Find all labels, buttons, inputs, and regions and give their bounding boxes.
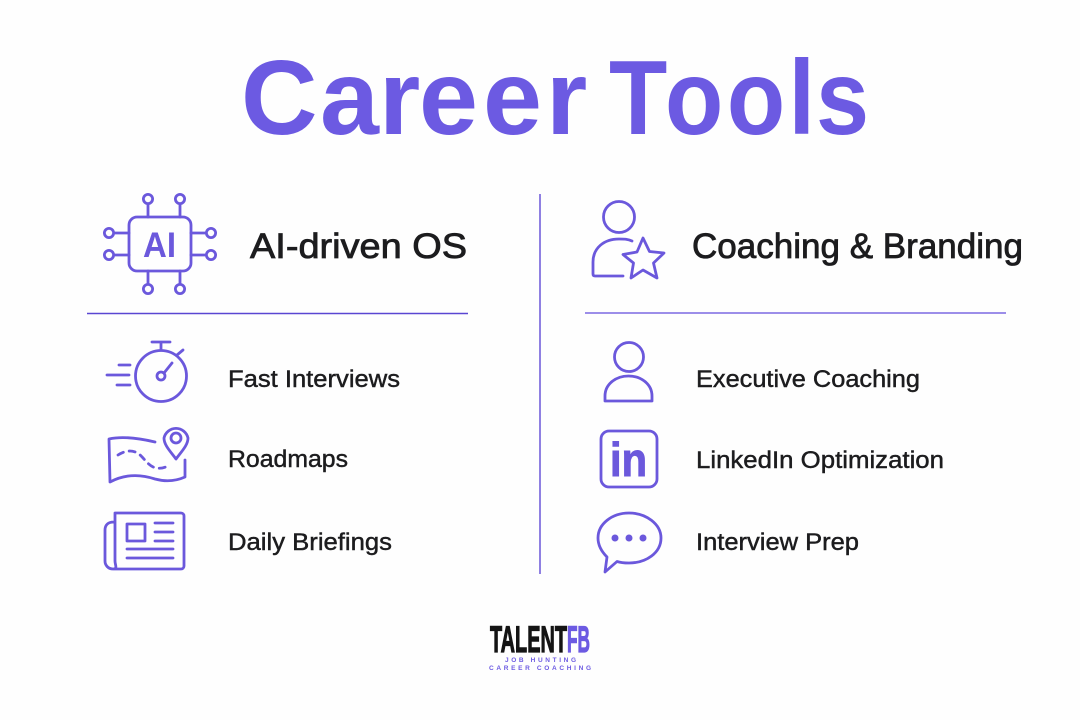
icon: map with pin bbox=[109, 428, 188, 482]
label: Daily Briefings: Daily Briefings bbox=[228, 529, 392, 556]
logo: TalentFB: JOB HUNTING bbox=[505, 657, 576, 664]
divider line left bbox=[87, 312, 468, 314]
icon: AI chip: AI bbox=[143, 226, 176, 265]
title: Career bbox=[241, 39, 587, 157]
heading: AI-driven OS: AI-driven OS bbox=[250, 227, 467, 266]
icon: LinkedIn: in bbox=[610, 433, 647, 486]
label: Interview Prep: Interview Prep bbox=[696, 529, 859, 556]
logo: TalentFB: CAREER COACHING bbox=[489, 665, 591, 672]
icon: stopwatch bbox=[107, 342, 186, 402]
icon: person with star bbox=[593, 202, 664, 278]
divider line right bbox=[585, 312, 1006, 314]
logo: TalentFB bbox=[489, 619, 591, 672]
icon: person bbox=[605, 342, 652, 401]
center divider bbox=[539, 194, 541, 574]
panel: AI-driven OS bbox=[87, 194, 468, 569]
title bbox=[241, 39, 869, 157]
panel: Coaching and Branding bbox=[585, 202, 1023, 572]
label: LinkedIn Optimization: LinkedIn Optimization bbox=[696, 447, 944, 474]
logo: TalentFB: TALENT bbox=[490, 619, 567, 660]
icon: speech bubble bbox=[598, 513, 661, 572]
label: Fast Interviews: Fast Interviews bbox=[228, 366, 400, 393]
label: Executive Coaching: Executive Coaching bbox=[696, 366, 920, 393]
label: Roadmaps: Roadmaps bbox=[228, 446, 348, 473]
heading: Coaching & Branding: Coaching & Branding bbox=[692, 227, 1023, 266]
icon: AI chip bbox=[104, 194, 216, 294]
icon: newspaper bbox=[105, 513, 184, 569]
title: Tools bbox=[609, 39, 869, 157]
text: FB bbox=[567, 619, 590, 660]
